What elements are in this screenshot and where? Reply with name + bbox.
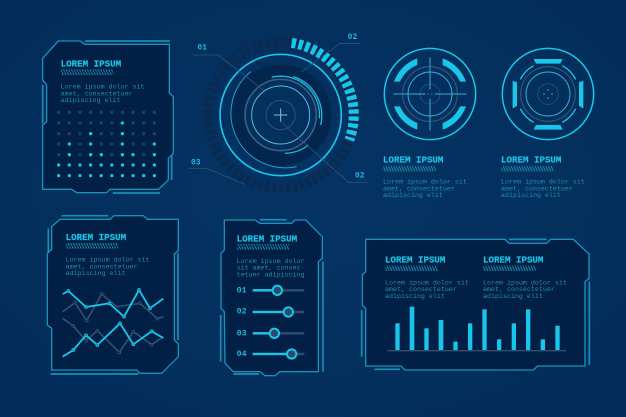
text block: tetuer adipiscing: [237, 270, 305, 278]
radial dial: [188, 33, 367, 188]
dial labels: [191, 33, 365, 181]
caption: right gauge: adipiscing elit: [501, 191, 561, 199]
slider 04: [237, 349, 304, 359]
slider 02: [237, 307, 304, 317]
pointer lines: [188, 43, 367, 184]
slider 01: [237, 285, 304, 295]
text block left: amet, consectetuer: [385, 285, 457, 293]
caption: right gauge: Lorem ipsum dolor sit: [501, 178, 585, 186]
caption: left gauge: [383, 154, 467, 199]
panel: bar chart: [362, 239, 589, 370]
dial tick ring: [208, 42, 354, 188]
gauges and captions: [383, 48, 594, 199]
text block left: [385, 278, 469, 300]
text block: adipiscing elit: [61, 96, 121, 104]
crosshair: [274, 108, 287, 122]
text block: Lorem ipsum dolor sit: [66, 256, 150, 264]
dark inner disc: [230, 64, 331, 166]
text block: [61, 83, 145, 104]
caption: right gauge: [501, 154, 585, 199]
text block right: [483, 278, 567, 300]
slider 03: [237, 328, 304, 338]
caption: right gauge: LOREM IPSUM: [501, 154, 562, 165]
gauge: crosshair: [384, 48, 476, 140]
dial labels: 01: [197, 44, 207, 53]
caption: left gauge: Lorem ipsum dolor sit: [383, 178, 467, 186]
heading: LOREM IPSUM: [61, 59, 122, 70]
text block left: adipiscing elit: [385, 292, 445, 300]
panel: sliders: [221, 220, 323, 376]
slider 01: 01: [237, 285, 247, 295]
caption: left gauge: LOREM IPSUM: [383, 154, 444, 165]
slider 04: 04: [237, 349, 247, 359]
slider 03: 03: [237, 328, 247, 338]
heading right: LOREM IPSUM: [483, 254, 544, 265]
gauge: segmented: [502, 48, 594, 140]
caption: left gauge: adipiscing elit: [383, 191, 443, 199]
bar chart: [387, 307, 566, 351]
panel: line chart: [47, 216, 178, 374]
dial labels: 02: [355, 172, 365, 181]
text block: adipiscing elit: [66, 269, 126, 277]
caption: right gauge: amet, consectetuer: [501, 184, 573, 192]
text block: Lorem ipsum dolor sit: [61, 83, 145, 91]
heading left: LOREM IPSUM: [385, 254, 446, 265]
slider 02: 02: [237, 307, 247, 317]
text block right: adipiscing elit: [483, 292, 543, 300]
text block: sit amet, consec-: [237, 264, 305, 272]
bright tick arc: [292, 43, 354, 140]
bright arcs: [272, 76, 322, 153]
caption: left gauge: amet, consectetuer: [383, 184, 455, 192]
text block: Lorem ipsum dolor: [237, 257, 305, 265]
heading: LOREM IPSUM: [66, 232, 127, 243]
heading: LOREM IPSUM: [237, 233, 298, 244]
text block right: Lorem ipsum dolor sit: [483, 278, 567, 286]
panel: dot matrix: [43, 41, 173, 193]
dial labels: 03: [191, 158, 201, 167]
text block: amet, consectetuer: [66, 262, 138, 270]
thin arc: [231, 72, 297, 168]
text block: amet, consectetuer: [61, 89, 133, 97]
inner ring: [252, 86, 310, 144]
outer ring: [220, 54, 341, 176]
text block: [66, 256, 150, 277]
text block right: amet, consectetuer: [483, 285, 555, 293]
dial labels: 02: [348, 33, 357, 42]
text block left: Lorem ipsum dolor sit: [385, 278, 469, 286]
text block: [237, 257, 305, 278]
dot chart: [59, 112, 157, 176]
line chart: [63, 289, 163, 357]
